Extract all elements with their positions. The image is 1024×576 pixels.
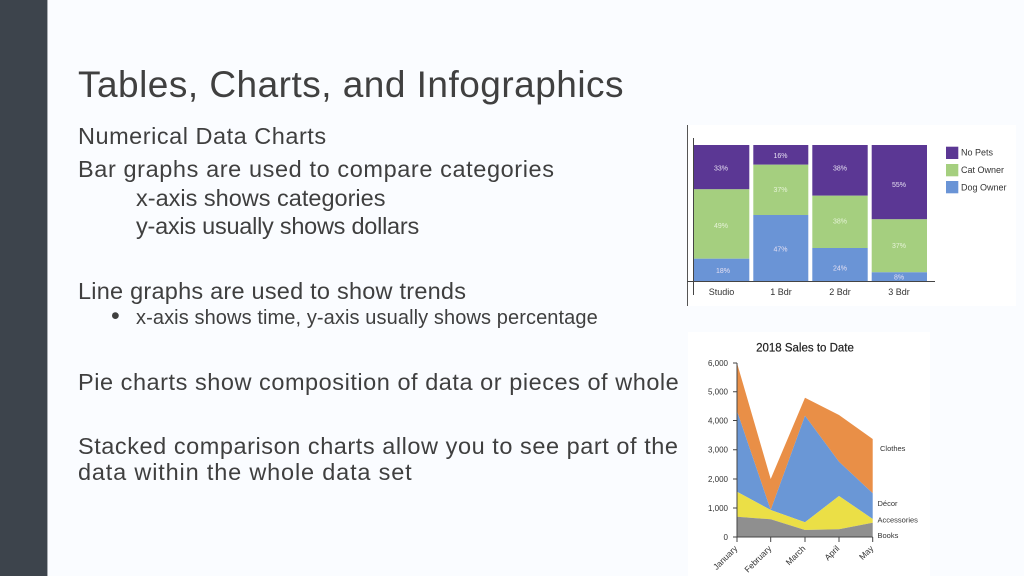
bar value labels: 55% xyxy=(892,182,906,189)
series labels: Décor xyxy=(878,499,898,508)
y-axis labels: 5,000 xyxy=(708,388,729,396)
text block: pie charts: Pie charts show composition of data or pieces of whole xyxy=(78,369,679,395)
bar value labels: 33% xyxy=(714,166,728,172)
chart: stacked bar of pet ownership xyxy=(687,125,1007,306)
bar value labels: 38% xyxy=(833,166,847,172)
series labels: Clothes xyxy=(880,444,906,453)
text block: line graphs: Line graphs are used to show trends xyxy=(78,278,466,304)
area: accessories xyxy=(737,492,873,530)
legend xyxy=(946,147,1007,193)
axes xyxy=(733,363,873,542)
axes xyxy=(687,138,935,295)
text block: line graphs xyxy=(78,278,598,330)
sidebar xyxy=(0,0,48,576)
area: decor xyxy=(737,411,873,522)
category labels: Studio xyxy=(709,287,734,297)
text block: line graphs: x-axis shows time, y-axis usually shows percentage xyxy=(136,307,598,329)
series labels: Books xyxy=(878,531,899,540)
text block: bar graphs: Bar graphs are used to compare categories xyxy=(78,156,555,182)
bar value labels: 18% xyxy=(716,268,730,275)
text block: bar graphs: x-axis shows categories xyxy=(136,185,385,211)
category labels: 1 Bdr xyxy=(770,287,792,297)
chart title: 2018 Sales to Date xyxy=(756,342,854,354)
bar value labels: 37% xyxy=(773,187,788,194)
category labels: 3 Bdr xyxy=(888,287,910,297)
y-axis labels xyxy=(708,359,729,542)
month labels: January xyxy=(711,543,740,572)
bar value labels: 47% xyxy=(773,246,788,254)
bar value labels: 8% xyxy=(894,274,904,282)
text block: bar graphs: y-axis usually shows dollars xyxy=(136,213,419,239)
y-axis labels: 4,000 xyxy=(708,416,729,426)
legend: Dog Owner xyxy=(961,182,1007,192)
legend: No Pets xyxy=(961,148,994,158)
series labels xyxy=(878,444,918,540)
legend: Cat Owner xyxy=(961,165,1004,175)
bar value labels: 24% xyxy=(833,266,847,272)
category labels xyxy=(709,287,910,297)
text block: stacked comparison charts: data within the whole data set xyxy=(78,459,413,485)
text block: numerical data charts: Numerical Data Charts xyxy=(78,123,327,149)
chart: 2018 sales area chart xyxy=(708,342,918,574)
month labels: April xyxy=(822,543,841,562)
bar value labels: 49% xyxy=(714,223,728,230)
y-axis labels: 1,000 xyxy=(708,504,729,513)
y-axis labels: 0 xyxy=(724,533,729,542)
text block: line graphs: • xyxy=(111,302,120,330)
y-axis labels: 2,000 xyxy=(708,475,729,484)
bars xyxy=(694,145,927,281)
month labels xyxy=(711,543,876,574)
month labels: February xyxy=(742,543,774,574)
text block: stacked comparison charts: Stacked comparison charts allow you to see part of the xyxy=(78,433,679,459)
y-axis labels: 3,000 xyxy=(708,446,729,454)
area: clothes xyxy=(737,363,873,510)
text block: bar graphs xyxy=(78,156,555,239)
series labels: Accessories xyxy=(878,516,918,524)
title: Tables, Charts, and Infographics xyxy=(78,64,624,105)
month labels: March xyxy=(784,543,808,567)
category labels: 2 Bdr xyxy=(829,287,851,297)
area: books xyxy=(737,517,873,537)
y-axis labels: 6,000 xyxy=(708,359,729,368)
bar value labels xyxy=(714,153,906,282)
text block: stacked comparison charts xyxy=(78,433,679,485)
bar value labels: 16% xyxy=(773,153,788,160)
bar value labels: 38% xyxy=(833,218,847,226)
month labels: May xyxy=(857,543,876,562)
bar value labels: 37% xyxy=(892,243,906,250)
